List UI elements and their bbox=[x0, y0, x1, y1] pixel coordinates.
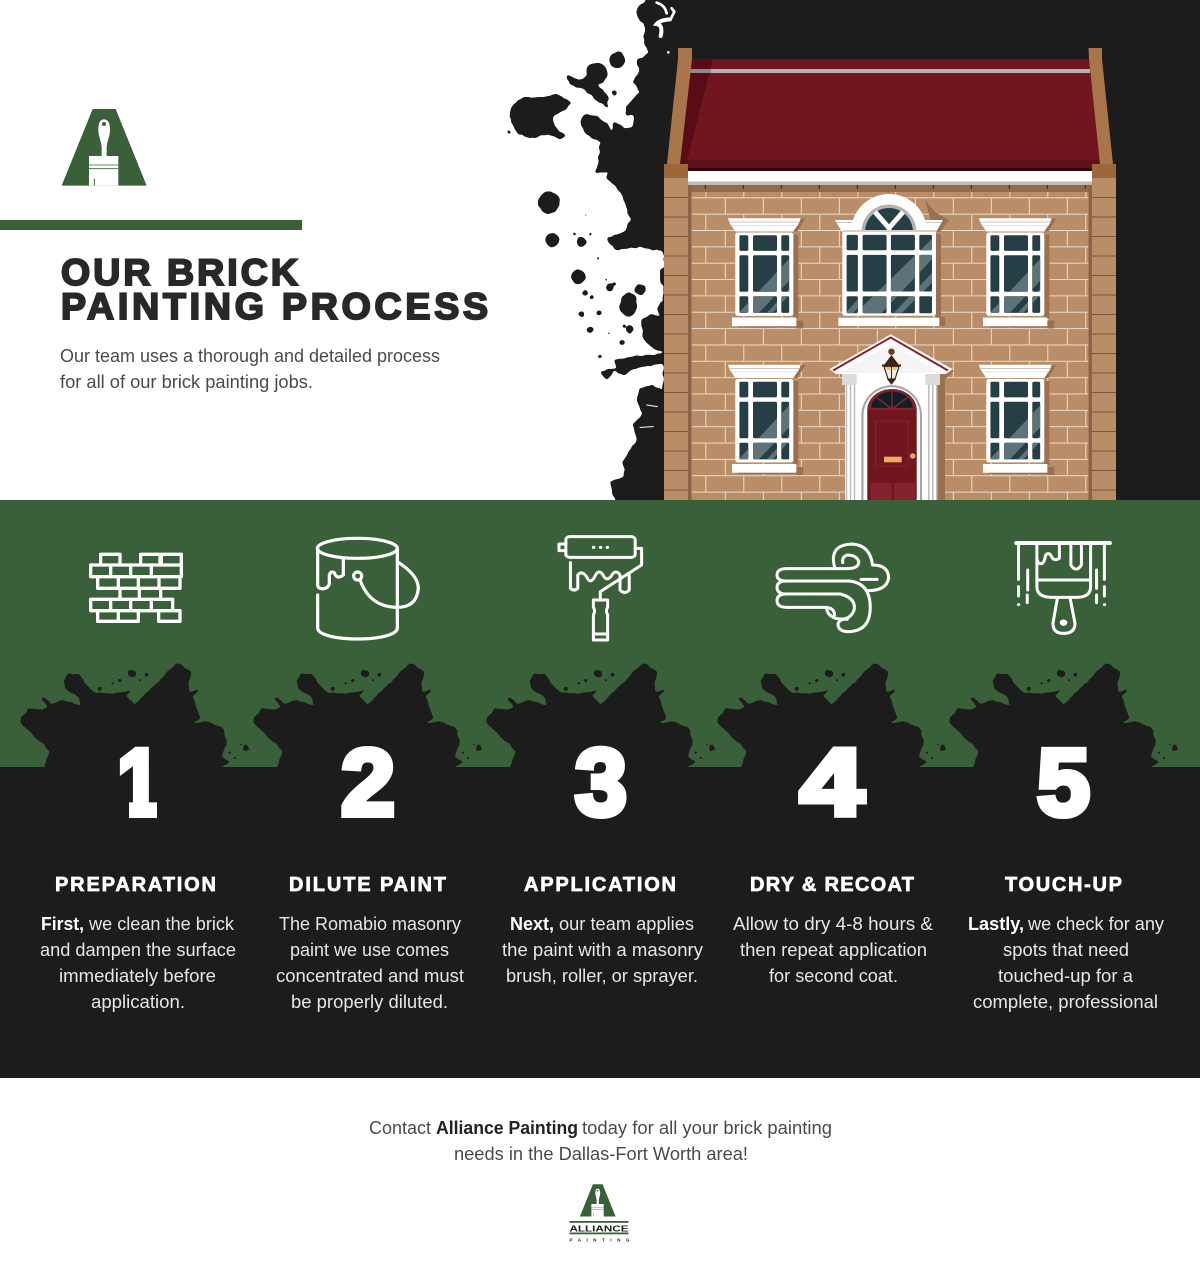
step 1: preparation: we clean the brick bbox=[88, 914, 235, 934]
number 4: 4 bbox=[800, 730, 864, 836]
number 3: 3 bbox=[575, 730, 627, 836]
title: OUR BRICK bbox=[61, 251, 298, 293]
corner pillars bbox=[664, 164, 1116, 500]
arched centre window bbox=[835, 194, 949, 326]
step 2: dilute paint: paint we use comes bbox=[290, 940, 449, 960]
icon: paint bucket bbox=[317, 538, 418, 639]
title: PAINTING PROCESS bbox=[61, 285, 488, 327]
step 1: preparation: and dampen the surface bbox=[40, 940, 236, 960]
intro text bbox=[60, 346, 440, 392]
step 3: application: APPLICATION bbox=[524, 874, 676, 896]
step 5: touch-up: TOUCH-UP bbox=[1005, 874, 1122, 896]
step 4: dry and recoat: for second coat. bbox=[769, 966, 898, 986]
step 5: touch-up: touched-up for a bbox=[998, 966, 1134, 986]
icon: bricks bbox=[91, 554, 181, 621]
window upper left bbox=[728, 218, 805, 328]
step 5: touch-up: we check for any bbox=[1027, 914, 1164, 934]
number 5: 5 bbox=[1037, 730, 1090, 836]
step 5: touch-up: Lastly, bbox=[968, 914, 1024, 934]
panel: hero background bbox=[0, 0, 1200, 500]
step 2: dilute paint: DILUTE PAINT bbox=[289, 874, 446, 896]
roof gable posts bbox=[667, 48, 1113, 164]
roof bbox=[680, 59, 1102, 172]
step 3: application: brush, roller, or sprayer. bbox=[506, 966, 698, 986]
contact text: needs in the Dallas-Fort Worth area! bbox=[454, 1144, 748, 1164]
step 2: dilute paint: be properly diluted. bbox=[291, 992, 448, 1012]
footer logo bbox=[570, 1184, 630, 1242]
brick wall bbox=[688, 178, 1092, 500]
front door bbox=[867, 389, 917, 500]
logo bbox=[62, 109, 147, 186]
splatter 3 bbox=[485, 663, 717, 768]
icon: paint roller bbox=[559, 537, 642, 640]
door portico bbox=[829, 334, 954, 500]
step 2: dilute paint: concentrated and must bbox=[276, 966, 464, 986]
step 2: dilute paint: The Romabio masonry bbox=[279, 914, 461, 934]
step 4: dry and recoat bbox=[733, 874, 933, 986]
step 4: dry and recoat: Allow to dry 4-8 hours & bbox=[733, 914, 933, 934]
contact text bbox=[369, 1118, 832, 1164]
splatter white details bbox=[640, 3, 674, 427]
roof fascia bbox=[688, 171, 1092, 185]
step 3: application bbox=[502, 874, 703, 986]
step 5: touch-up: complete, professional bbox=[973, 992, 1158, 1012]
panel: process green band bbox=[0, 500, 1200, 767]
splatter 5 bbox=[948, 663, 1180, 768]
intro text: Our team uses a thorough and detailed process bbox=[60, 346, 440, 366]
step 4: dry and recoat: then repeat application bbox=[740, 940, 927, 960]
step 3: application: our team applies bbox=[559, 914, 694, 934]
contact text: Contact bbox=[369, 1118, 431, 1138]
paint splatter backdrop bbox=[508, 0, 1200, 520]
panel: footer background bbox=[0, 1078, 1200, 1280]
footer logo: ALLIANCE bbox=[570, 1224, 629, 1234]
title bbox=[61, 251, 488, 327]
step 3: application: Next, bbox=[510, 914, 554, 934]
splatter 2 bbox=[252, 663, 484, 768]
contact text: Alliance Painting bbox=[436, 1118, 578, 1138]
contact text: today for all your brick painting bbox=[582, 1118, 832, 1138]
step 1: preparation: PREPARATION bbox=[55, 874, 216, 896]
window lower left bbox=[728, 365, 805, 475]
panel: process black band bbox=[0, 767, 1200, 1078]
step 1: preparation bbox=[40, 874, 236, 1012]
number 1: 1 bbox=[117, 730, 161, 836]
step 4: dry and recoat: DRY & RECOAT bbox=[750, 874, 914, 896]
icon: dripping brush bbox=[1016, 543, 1110, 633]
number 2: 2 bbox=[341, 730, 395, 836]
splatter 4 bbox=[716, 663, 948, 768]
step 5: touch-up: spots that need bbox=[1003, 940, 1129, 960]
footer logo: PAINTING bbox=[570, 1238, 630, 1242]
step 1: preparation: First, bbox=[41, 914, 84, 934]
step 2: dilute paint bbox=[276, 874, 464, 1012]
window upper right bbox=[979, 218, 1056, 328]
splatter 1 bbox=[19, 663, 251, 768]
step 1: preparation: application. bbox=[91, 992, 185, 1012]
intro text: for all of our brick painting jobs. bbox=[60, 372, 313, 392]
lantern bbox=[882, 348, 901, 384]
step 1: preparation: immediately before bbox=[59, 966, 216, 986]
accent bar bbox=[0, 220, 302, 230]
house illustration bbox=[664, 48, 1116, 500]
window lower right bbox=[979, 365, 1056, 475]
step 5: touch-up bbox=[968, 874, 1164, 1012]
step 3: application: the paint with a masonry bbox=[502, 940, 703, 960]
icon: wind bbox=[777, 544, 889, 632]
